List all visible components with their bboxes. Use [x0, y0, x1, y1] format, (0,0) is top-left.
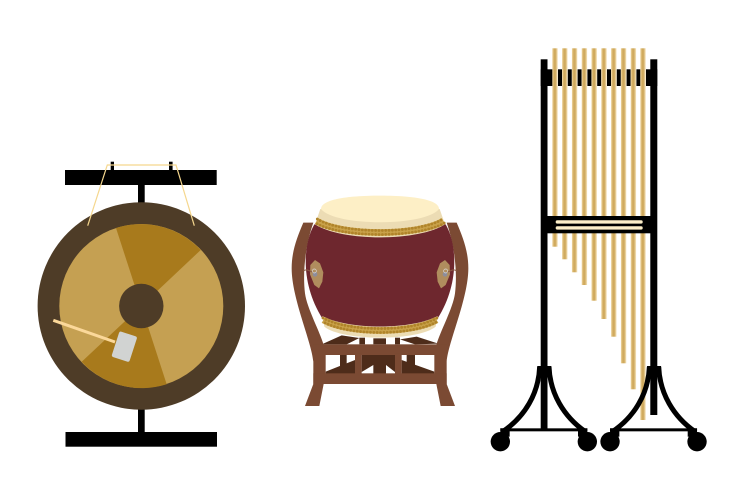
gong hanging cord — [88, 165, 194, 226]
chime left base — [491, 366, 597, 451]
taiko drum — [292, 196, 468, 406]
drum head — [321, 196, 439, 222]
drum upper band — [315, 209, 445, 237]
gong face — [59, 224, 223, 388]
gong hub — [119, 284, 164, 328]
chime tubes — [552, 48, 646, 420]
gong mallet — [53, 320, 137, 362]
chime right base — [600, 366, 707, 451]
tubular chimes — [491, 48, 707, 451]
gong — [38, 162, 245, 447]
gong stand — [65, 162, 217, 447]
drum handle right — [437, 260, 457, 288]
drum lower band — [322, 316, 438, 338]
gong rim — [38, 202, 245, 410]
gong dark wedges — [82, 224, 201, 388]
chime top bar pegs — [541, 69, 657, 86]
drum body — [306, 224, 454, 330]
drum stand back legs — [322, 335, 438, 374]
chime posts — [541, 59, 657, 430]
drum stand frame — [292, 223, 468, 406]
drum handle left — [303, 260, 323, 288]
chime cross bar — [547, 216, 651, 233]
